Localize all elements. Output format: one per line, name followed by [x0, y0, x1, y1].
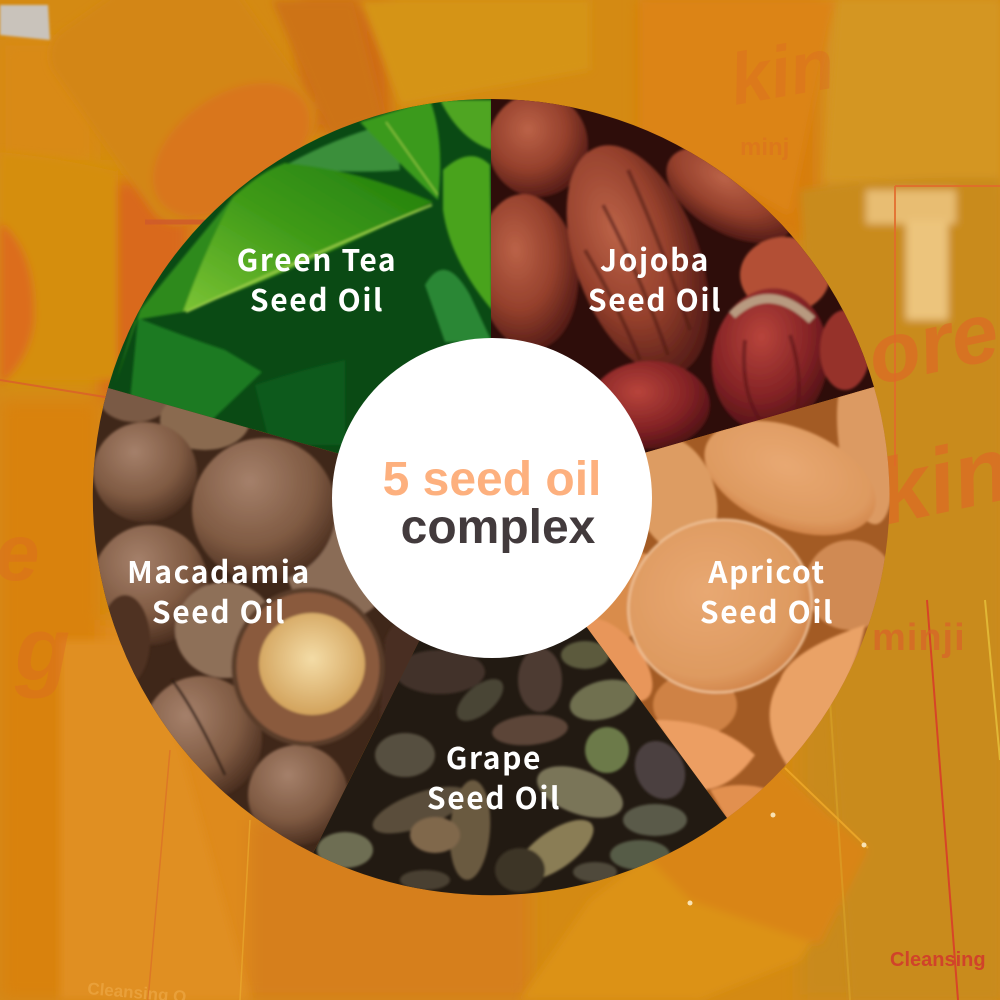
label: apricot seed oil: Seed Oil	[700, 588, 834, 632]
panel: grape seed sector	[313, 627, 727, 896]
grape seeds	[317, 641, 694, 892]
background bottle lettering: minji	[872, 617, 966, 659]
label: apricot seed oil: Apricot	[707, 548, 826, 592]
bottle: bottom right tilted	[520, 760, 868, 1000]
apricot kernels	[586, 387, 890, 818]
background bottle lettering: g	[14, 600, 70, 700]
label: jojoba seed oil: Seed Oil	[588, 276, 722, 320]
label: macadamia seed oil: Macadamia	[127, 548, 311, 592]
jojoba seeds	[470, 93, 870, 449]
cracked macadamia	[234, 590, 382, 744]
label: grape seed oil: Grape	[446, 734, 542, 778]
background: amber oil bottles: Cleansing	[890, 949, 986, 971]
label: apricot seed oil	[700, 548, 834, 632]
centre text: 5 seed oil: 5 seed oil	[383, 453, 601, 506]
centre circle	[332, 338, 652, 658]
label: grape seed oil	[427, 734, 561, 818]
macadamia nuts	[92, 378, 430, 845]
label: jojoba seed oil	[588, 236, 722, 320]
bottle: top centre	[360, 0, 590, 105]
label: macadamia seed oil: Seed Oil	[152, 588, 286, 632]
background bottle lettering: minj	[740, 134, 789, 161]
background bottle lettering	[0, 24, 1000, 700]
bottle: lower left tall	[60, 640, 250, 1000]
bottle: right vertical	[825, 0, 1000, 180]
panel: apricot sector	[586, 387, 890, 818]
label: green tea seed oil: Seed Oil	[250, 276, 384, 320]
label: green tea seed oil: Green Tea	[237, 236, 397, 280]
background bottle lettering: kin	[724, 24, 840, 121]
bottle: left rim details	[0, 152, 118, 380]
label: jojoba seed oil: Jojoba	[600, 236, 710, 280]
panel: macadamia sector	[92, 388, 420, 853]
label: green tea seed oil	[237, 236, 397, 320]
centre text: complex: complex	[401, 501, 596, 554]
panel: green tea sector	[108, 99, 491, 454]
label: macadamia seed oil	[127, 548, 311, 632]
label: grape seed oil: Seed Oil	[427, 774, 561, 818]
bottle: top left tilted	[38, 0, 341, 253]
panel: jojoba sector	[491, 99, 874, 452]
green tea leaves	[115, 100, 492, 445]
